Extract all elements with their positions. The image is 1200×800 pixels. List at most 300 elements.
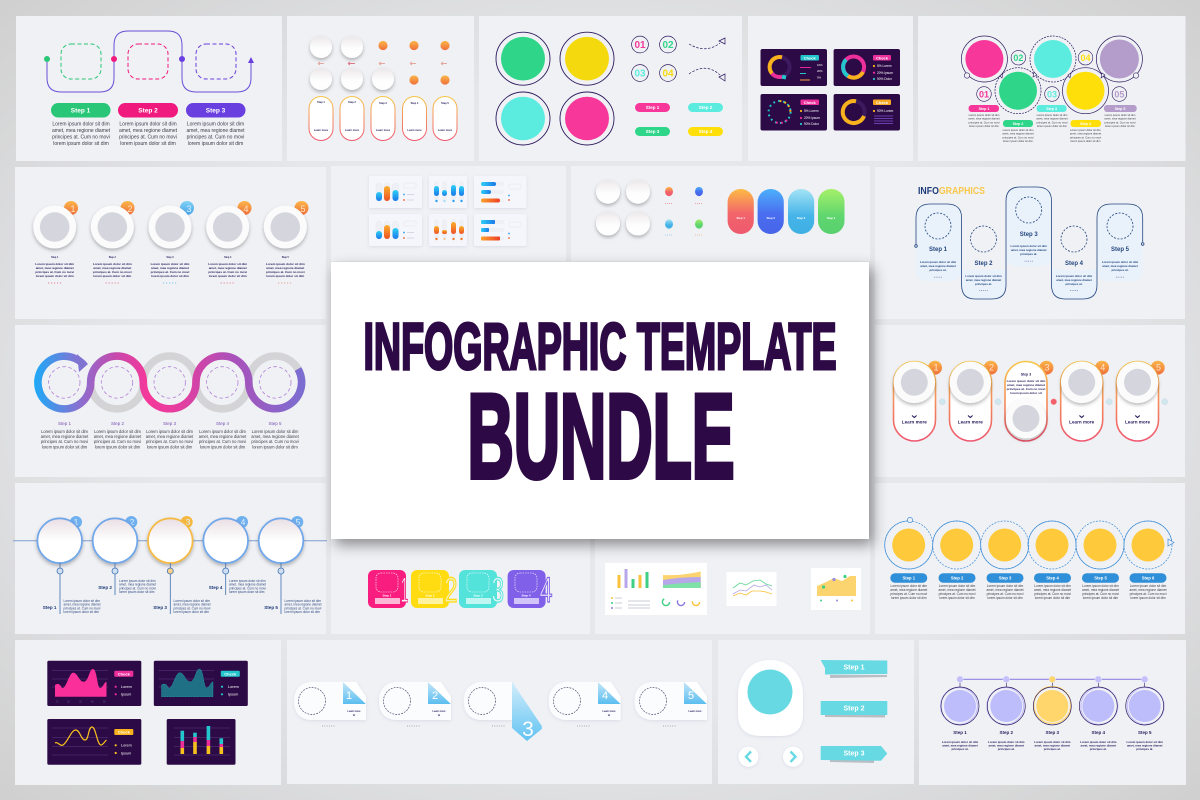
panel: lilac circles timeline bbox=[919, 640, 1186, 785]
descriptions: lorem ipsum dolor sit dim bbox=[64, 610, 99, 614]
step text: Step 5 bbox=[282, 256, 290, 259]
descriptions: lorem ipsum dolor sit dim bbox=[939, 596, 975, 600]
top rail and nodes bbox=[957, 676, 1148, 688]
capsule 4: Step 4 bbox=[827, 216, 836, 220]
open card text: lorem ipsum dolor sit bbox=[1010, 391, 1042, 395]
ribbon arrow tip bbox=[77, 354, 88, 372]
step descriptions: amet, mea regione diamet bbox=[1002, 132, 1034, 136]
numbered badges: 03 bbox=[1047, 89, 1057, 99]
learn more labels: Learn more bbox=[902, 420, 927, 424]
descriptions: Lorem ipsum dolor sit dim bbox=[1056, 274, 1093, 278]
step labels: Step 2 bbox=[1000, 730, 1014, 735]
card: donut 2: Check bbox=[876, 55, 889, 60]
descriptions: Lorem ipsum dolor sit dim bbox=[1011, 244, 1047, 248]
ribbon step 3 bbox=[821, 746, 887, 763]
descriptions: amet, mea regione diamet bbox=[93, 266, 131, 270]
step labels: Step 3 bbox=[153, 605, 167, 610]
descriptions: • • • • • bbox=[1025, 259, 1033, 263]
card: line chart bbox=[726, 572, 776, 606]
card: donut 2 bbox=[834, 49, 900, 86]
numbered badges: 05 bbox=[1114, 89, 1124, 99]
step descriptions: lorem ipsum dolor sit dim bbox=[188, 141, 243, 147]
card: dotted donut: 5% Lorem bbox=[804, 109, 819, 113]
descriptions: • • • • • bbox=[1070, 288, 1078, 292]
card: donut 1: 20% bbox=[817, 69, 823, 73]
card: pink area chart: Lorem bbox=[121, 685, 132, 689]
descriptions: amet, mea regione diamet bbox=[174, 603, 211, 607]
descriptions: amet, mea regione diamet bbox=[1129, 588, 1167, 592]
step descriptions: principes at. Cum no movi bbox=[1036, 120, 1068, 124]
step descriptions: principes at. Cum no movi bbox=[52, 134, 110, 140]
white plates bbox=[894, 362, 1158, 438]
card 2: 2 bbox=[432, 690, 438, 702]
step descriptions: Lorem ipsum dolor sit dim bbox=[1003, 128, 1034, 132]
descriptions bbox=[64, 579, 322, 614]
discs bbox=[944, 690, 1161, 722]
descriptions: amet, mea regione diamet bbox=[1082, 588, 1119, 592]
badges: 3 bbox=[186, 204, 192, 214]
step pills: Step 4 bbox=[1046, 576, 1059, 581]
panel: numbered colour cards bbox=[331, 538, 590, 634]
descriptions: amet, mea regione diamet bbox=[151, 266, 189, 270]
panel: numbered colour cards: 1 bbox=[400, 571, 408, 610]
open card text: amet, mea regione diamet bbox=[1007, 383, 1045, 387]
card: horizontal bars bbox=[474, 176, 526, 208]
descriptions: Lorem ipsum dolor sit dim bbox=[891, 584, 927, 588]
panel: yellow circles with rings bbox=[875, 483, 1185, 634]
descriptions: Lorem ipsum dolor sit dim bbox=[35, 262, 74, 266]
card: donut 1: 10% bbox=[817, 63, 823, 67]
step descriptions bbox=[968, 113, 1136, 143]
pill labels bbox=[314, 100, 453, 132]
step labels: Step 2 bbox=[98, 585, 112, 590]
badges: 3 bbox=[186, 517, 191, 527]
descriptions: amet, mea regione diamet bbox=[986, 588, 1024, 592]
step pills bbox=[969, 105, 1137, 127]
step descriptions: principes at. Cum no movi bbox=[1002, 135, 1034, 139]
step descriptions: Lorem ipsum dolor sit dim bbox=[119, 122, 177, 128]
card: pink area chart: 50 bbox=[103, 700, 106, 704]
descriptions: lorem ipsum dolor sit dim bbox=[1083, 596, 1119, 600]
step descriptions: principes at. Cum no movi bbox=[968, 120, 1000, 124]
descriptions: Lorem ipsum dolor sit dim bbox=[93, 262, 132, 266]
descriptions: amet, mea regione diamet bbox=[942, 744, 978, 748]
badges bbox=[928, 361, 1165, 375]
badges: 4 bbox=[241, 517, 246, 527]
yellow discs bbox=[892, 528, 1164, 562]
numbered circles: 02 bbox=[662, 40, 674, 51]
badges: 3 bbox=[1044, 362, 1050, 372]
descriptions: amet, mea regione diamet bbox=[41, 434, 89, 439]
card: yellow line chart bbox=[47, 719, 141, 765]
step descriptions: lorem ipsum dolor sit dim bbox=[1105, 124, 1136, 128]
descriptions: amet, mea regione diamet bbox=[119, 583, 156, 587]
grey rings bbox=[91, 356, 302, 409]
ribbon step 1 bbox=[821, 660, 887, 678]
pill labels: Learn more bbox=[407, 128, 422, 132]
small arrows bbox=[318, 62, 447, 65]
step labels bbox=[929, 232, 1130, 267]
descriptions: amet, mea regione diamet bbox=[146, 434, 194, 439]
card 1 bbox=[294, 682, 366, 726]
descriptions: Lorem ipsum dolor sit dim bbox=[119, 579, 156, 583]
descriptions bbox=[942, 740, 1163, 751]
white circles bbox=[310, 36, 394, 90]
descriptions: amet, mea regione diamet bbox=[920, 264, 956, 268]
descriptions: amet, mea regione diamet bbox=[94, 434, 142, 439]
descriptions: Lorem ipsum dolor sit dim bbox=[1127, 740, 1163, 744]
step text: Step 2 bbox=[109, 256, 117, 259]
descriptions: principes at. Cum no movi bbox=[41, 439, 88, 444]
descriptions: Lorem ipsum dolor sit dim bbox=[146, 429, 194, 434]
dashed placeholders bbox=[915, 197, 1144, 252]
step pills: Step 3 bbox=[206, 108, 226, 114]
step labels: Step 2 bbox=[974, 261, 993, 267]
white plates bbox=[33, 206, 307, 248]
descriptions: principes at. Cum no movi bbox=[174, 606, 211, 610]
card: teal area chart bbox=[154, 661, 248, 706]
learn more labels bbox=[902, 420, 1150, 424]
descriptions: Lorem ipsum dolor sit dim bbox=[174, 599, 210, 603]
descriptions: amet, mea regione diamet bbox=[266, 266, 304, 270]
descriptions: principes at. Cum no movi bbox=[284, 606, 322, 610]
outlined step pills bbox=[309, 96, 457, 140]
descriptions: principes at. bbox=[1044, 747, 1061, 751]
descriptions: Lorem ipsum dolor sit dim bbox=[199, 429, 247, 434]
open card text: principes at. Cum no movi bbox=[1007, 387, 1045, 391]
card: pink area chart: 10 bbox=[56, 700, 59, 704]
title line 1: INFOGRAPHIC TEMPLATE bbox=[364, 309, 836, 383]
descriptions: amet, mea regione diamet bbox=[1081, 744, 1116, 748]
orbit rings bbox=[885, 517, 1174, 569]
card: bars, area and rings bbox=[605, 563, 707, 615]
card 3 with pennant bbox=[464, 682, 542, 741]
white blob with teal disc bbox=[738, 660, 803, 736]
step labels bbox=[43, 585, 278, 610]
descriptions: amet, mea regione diamet bbox=[989, 744, 1024, 748]
pill labels: Step 4 bbox=[411, 101, 419, 105]
descriptions: lorem ipsum dolor sit dim bbox=[209, 274, 247, 278]
descriptions: principes at. Cum no movi bbox=[229, 586, 266, 590]
step descriptions: lorem ipsum dolor sit dim bbox=[1037, 124, 1068, 128]
step descriptions: Lorem ipsum dolor sit dim bbox=[1037, 113, 1068, 117]
step descriptions: lorem ipsum dolor sit dim bbox=[1003, 139, 1034, 143]
descriptions: amet, mea regione diamet bbox=[251, 434, 300, 439]
step descriptions: principes at. Cum no movi bbox=[187, 134, 244, 140]
previous button bbox=[738, 747, 758, 767]
step labels: Step 2 bbox=[111, 421, 124, 426]
card 2: Step 2 bbox=[425, 594, 435, 598]
step pills: Step 1 bbox=[71, 108, 91, 114]
card 4 bbox=[549, 682, 621, 726]
descriptions: lorem ipsum dolor sit dim bbox=[200, 444, 246, 449]
card 2 bbox=[379, 682, 451, 726]
learn more labels: Learn more bbox=[1125, 420, 1150, 424]
card 5: Learn more bbox=[688, 710, 702, 713]
card: yellow line chart: Lorem bbox=[121, 744, 132, 748]
numbered badges bbox=[977, 50, 1127, 101]
capsule 4 bbox=[818, 189, 844, 234]
step labels: Step 5 bbox=[264, 605, 278, 610]
card: arc donut: Check bbox=[876, 100, 889, 105]
card 4: 4 bbox=[602, 690, 608, 702]
descriptions: principes at. bbox=[975, 282, 992, 286]
descriptions: lorem ipsum dolor sit dim bbox=[42, 444, 88, 449]
step descriptions: amet, mea regione diamet bbox=[1036, 117, 1068, 121]
step circles bbox=[37, 518, 303, 563]
descriptions: amet, mea regione diamet bbox=[966, 278, 1001, 282]
connector path with arrow bbox=[44, 31, 254, 92]
descriptions: principes at. Cum no movi bbox=[266, 270, 305, 274]
pill labels: Learn more bbox=[376, 128, 391, 132]
pill labels: Step 5 bbox=[441, 101, 449, 105]
step descriptions: amet, mea regione diamet bbox=[968, 117, 1000, 121]
descriptions: principes at. Cum no movi bbox=[146, 439, 193, 444]
descriptions: lorem ipsum dolor sit dim bbox=[1130, 596, 1166, 600]
descriptions: principes at. Cum no movi bbox=[939, 592, 976, 596]
step pills: Step 5 bbox=[1115, 107, 1125, 111]
step pills bbox=[635, 103, 723, 136]
soft white buttons bbox=[596, 180, 650, 236]
step pills: Step 2 bbox=[699, 105, 713, 110]
badges: 1 bbox=[74, 517, 79, 527]
card: yellow area chart bbox=[811, 568, 861, 610]
title line 2: BUNDLE bbox=[468, 370, 734, 504]
descriptions: principes at. Cum no movi bbox=[1082, 592, 1119, 596]
numbered badges: 04 bbox=[1080, 53, 1091, 63]
card: donut 2: 20% Ipsum bbox=[877, 71, 893, 75]
orange number dots bbox=[378, 41, 450, 85]
badges: 2 bbox=[130, 517, 135, 527]
step labels: Step 1 bbox=[929, 247, 948, 253]
step labels: Step 3 bbox=[1046, 730, 1060, 735]
step labels: Step 4 bbox=[1065, 261, 1084, 267]
wavy outline bbox=[916, 187, 1143, 299]
step text: Step 1 bbox=[51, 256, 59, 259]
descriptions: amet, mea regione diamet bbox=[284, 603, 322, 607]
card: donut 1 bbox=[760, 49, 827, 86]
descriptions: principes at. Cum no movi bbox=[1034, 592, 1071, 596]
card: arc donut bbox=[834, 94, 900, 130]
learn more labels: Learn more bbox=[1069, 420, 1095, 424]
descriptions: principes at. Cum no movi bbox=[35, 270, 74, 274]
descriptions bbox=[35, 262, 305, 278]
lilac outer arcs bbox=[940, 686, 1164, 724]
descriptions: amet, mea regione diamet bbox=[1127, 744, 1162, 748]
descriptions: principes at. Cum no movi bbox=[94, 439, 141, 444]
descriptions: Lorem ipsum dolor sit dim bbox=[987, 584, 1024, 588]
step descriptions: amet, mea regione diamet bbox=[119, 128, 178, 134]
card: dotted donut: 20% Ipsum bbox=[804, 116, 820, 120]
descriptions: lorem ipsum dolor sit dim bbox=[987, 596, 1023, 600]
card 4: Learn more bbox=[602, 710, 616, 713]
pill labels: Learn more bbox=[314, 128, 329, 132]
descriptions: Lorem ipsum dolor sit dim bbox=[1082, 584, 1119, 588]
descriptions: Lorem ipsum dolor sit dim bbox=[1102, 260, 1139, 264]
card: pink area chart bbox=[47, 661, 141, 706]
step descriptions: Lorem ipsum dolor sit dim bbox=[187, 122, 244, 128]
gradient ribbon bbox=[38, 356, 302, 409]
pill labels: Step 2 bbox=[348, 100, 356, 104]
drop lines and nodes bbox=[57, 563, 284, 614]
badges: 4 bbox=[1100, 362, 1105, 372]
card 4 bbox=[508, 570, 552, 610]
descriptions: Lorem ipsum dolor sit dim bbox=[942, 740, 979, 744]
descriptions: Lorem ipsum dolor sit dim bbox=[229, 579, 266, 583]
badges: 2 bbox=[127, 204, 133, 214]
panel: wave columns infographic bbox=[875, 167, 1185, 319]
descriptions: Lorem ipsum dolor sit dim bbox=[64, 599, 100, 603]
panel: timeline circles bbox=[13, 483, 327, 634]
descriptions: Lorem ipsum dolor sit dim bbox=[1080, 740, 1117, 744]
pill labels: Learn more bbox=[438, 128, 453, 132]
card: pink area chart: 40 bbox=[91, 700, 94, 704]
descriptions: amet, mea regione diamet bbox=[1056, 278, 1092, 282]
step labels: Step 3 bbox=[163, 421, 176, 426]
descriptions: principes at. Cum no movi bbox=[199, 439, 246, 444]
panel: dark donut cards bbox=[748, 16, 913, 161]
descriptions: lorem ipsum dolor sit dim bbox=[95, 444, 141, 449]
step pills: Step 4 bbox=[1080, 122, 1091, 126]
badges bbox=[64, 201, 308, 215]
panel: three step path bbox=[16, 16, 282, 161]
descriptions: Lorem ipsum dolor sit dim bbox=[920, 260, 957, 264]
panel: coloured circles bbox=[479, 16, 742, 161]
descriptions: amet, mea regione diamet bbox=[64, 603, 101, 607]
card: dotted donut: 90% Dolor bbox=[804, 122, 820, 126]
descriptions: principes at. Cum no movi bbox=[890, 592, 928, 596]
descriptions: principes at. bbox=[951, 747, 969, 751]
step pills: Step 6 bbox=[1142, 576, 1155, 581]
card 3: Step 3 bbox=[473, 594, 483, 598]
step descriptions: lorem ipsum dolor sit dim bbox=[120, 141, 176, 147]
card: vertical bars orange bbox=[429, 214, 467, 246]
step pills bbox=[51, 103, 246, 118]
descriptions: lorem ipsum dolor sit dim bbox=[151, 274, 189, 278]
step pills: Step 2 bbox=[138, 108, 158, 114]
descriptions: amet, mea regione diamet bbox=[1011, 248, 1046, 252]
step labels: Step 4 bbox=[216, 421, 229, 426]
dashed arrows bbox=[689, 38, 725, 81]
descriptions: principes at. bbox=[1020, 252, 1037, 256]
descriptions: amet, mea regione diamet bbox=[938, 588, 976, 592]
descriptions: Lorem ipsum dolor sit dim bbox=[151, 262, 190, 266]
descriptions: • • • • • bbox=[934, 275, 942, 279]
card 4: 4 bbox=[540, 571, 552, 610]
badges bbox=[70, 516, 303, 528]
step labels: Step 5 bbox=[1111, 247, 1130, 253]
numbered badges: 01 bbox=[979, 89, 989, 99]
step labels: Step 1 bbox=[58, 421, 71, 426]
step labels: Step 4 bbox=[209, 585, 223, 590]
descriptions: principes at. bbox=[1065, 282, 1083, 286]
descriptions: principes at. Cum no movi bbox=[987, 592, 1024, 596]
descriptions: Lorem ipsum dolor sit dim bbox=[41, 429, 89, 434]
grey inner discs bbox=[40, 212, 300, 242]
step descriptions: principes at. Cum no movi bbox=[119, 134, 177, 140]
descriptions: lorem ipsum dolor sit dim bbox=[891, 596, 927, 600]
card: yellow line chart: Check bbox=[118, 730, 131, 735]
descriptions: Lorem ipsum dolor sit dim bbox=[939, 584, 976, 588]
card 3 bbox=[459, 570, 504, 610]
hero title card bbox=[331, 262, 869, 539]
card: dotted donut bbox=[760, 94, 827, 130]
step pills bbox=[890, 573, 1166, 583]
card: stacked bars bbox=[167, 719, 236, 765]
descriptions bbox=[41, 429, 300, 449]
numbered circles: 01 bbox=[634, 40, 646, 51]
step labels: Step 4 bbox=[1092, 730, 1106, 735]
descriptions: Lorem ipsum dolor sit dim bbox=[252, 429, 299, 434]
connector dots bbox=[939, 399, 1168, 405]
card 1: Learn more bbox=[347, 710, 361, 713]
card: yellow line chart: Ipsum bbox=[121, 751, 131, 755]
step labels: Step 5 bbox=[268, 421, 282, 426]
step pills: Step 2 bbox=[951, 576, 964, 581]
step descriptions: lorem ipsum dolor sit dim bbox=[969, 124, 1000, 128]
card 2 bbox=[411, 570, 458, 610]
ribbon step 3: Step 3 bbox=[843, 750, 865, 758]
descriptions: principes at. Cum no movi bbox=[93, 270, 132, 274]
ring nodes bbox=[964, 72, 1139, 78]
panel: teal slider bbox=[718, 640, 914, 784]
ribbon step 2: Step 2 bbox=[843, 706, 865, 712]
descriptions: amet, mea regione diamet bbox=[1102, 264, 1138, 268]
card: pink area chart: 30 bbox=[79, 700, 82, 704]
capsule 2: Step 2 bbox=[766, 216, 775, 220]
card: pink area chart: 20 bbox=[67, 700, 70, 704]
card 1: 1 bbox=[346, 690, 352, 702]
descriptions: • • • • • bbox=[1116, 275, 1124, 279]
descriptions: lorem ipsum dolor sit dim bbox=[284, 610, 320, 614]
badges: 5 bbox=[300, 204, 306, 214]
card: horizontal bars row 2 bbox=[474, 214, 526, 246]
descriptions: amet, mea regione diamet bbox=[229, 583, 266, 587]
descriptions: principes at. bbox=[998, 747, 1015, 751]
open card text: Step 3 bbox=[1021, 372, 1031, 376]
step labels: Step 1 bbox=[43, 605, 57, 610]
card: arc donut: 90% Lorem bbox=[877, 109, 894, 113]
card 4: Step 4 bbox=[521, 594, 531, 598]
card: pink area chart: Ipsum bbox=[121, 693, 131, 697]
big circle fills bbox=[501, 37, 609, 140]
step labels: Step 3 bbox=[1020, 232, 1038, 238]
step labels bbox=[953, 730, 1152, 735]
big rings bbox=[496, 32, 614, 145]
panel: gradient capsules bbox=[571, 166, 870, 261]
descriptions: principes at. bbox=[929, 268, 947, 272]
timeline rail bbox=[13, 540, 327, 542]
descriptions bbox=[920, 244, 1139, 292]
card 1: Step 1 bbox=[382, 594, 392, 598]
open card text: Lorem ipsum dolor sit dim bbox=[1007, 379, 1046, 383]
descriptions: amet, mea regione diamet bbox=[1034, 588, 1071, 592]
descriptions: amet, mea regione diamet bbox=[209, 266, 247, 270]
badges: 5 bbox=[296, 517, 301, 527]
step descriptions: amet, mea regione diamet bbox=[1070, 132, 1101, 136]
pill labels: Step 3 bbox=[379, 101, 387, 105]
step pills: Step 1 bbox=[646, 105, 660, 110]
step pills: Step 1 bbox=[903, 576, 916, 581]
step pills: Step 3 bbox=[999, 576, 1012, 581]
descriptions: principes at. Cum no movi bbox=[64, 606, 101, 610]
step descriptions: amet, mea regione diamet bbox=[52, 128, 111, 134]
step descriptions: Lorem ipsum dolor sit dim bbox=[969, 113, 1000, 117]
descriptions: • • • • • bbox=[979, 288, 988, 292]
panel: ribbon wave bbox=[15, 325, 326, 477]
descriptions: Lorem ipsum dolor sit dim bbox=[988, 740, 1025, 744]
step labels: Step 5 bbox=[1138, 730, 1152, 735]
